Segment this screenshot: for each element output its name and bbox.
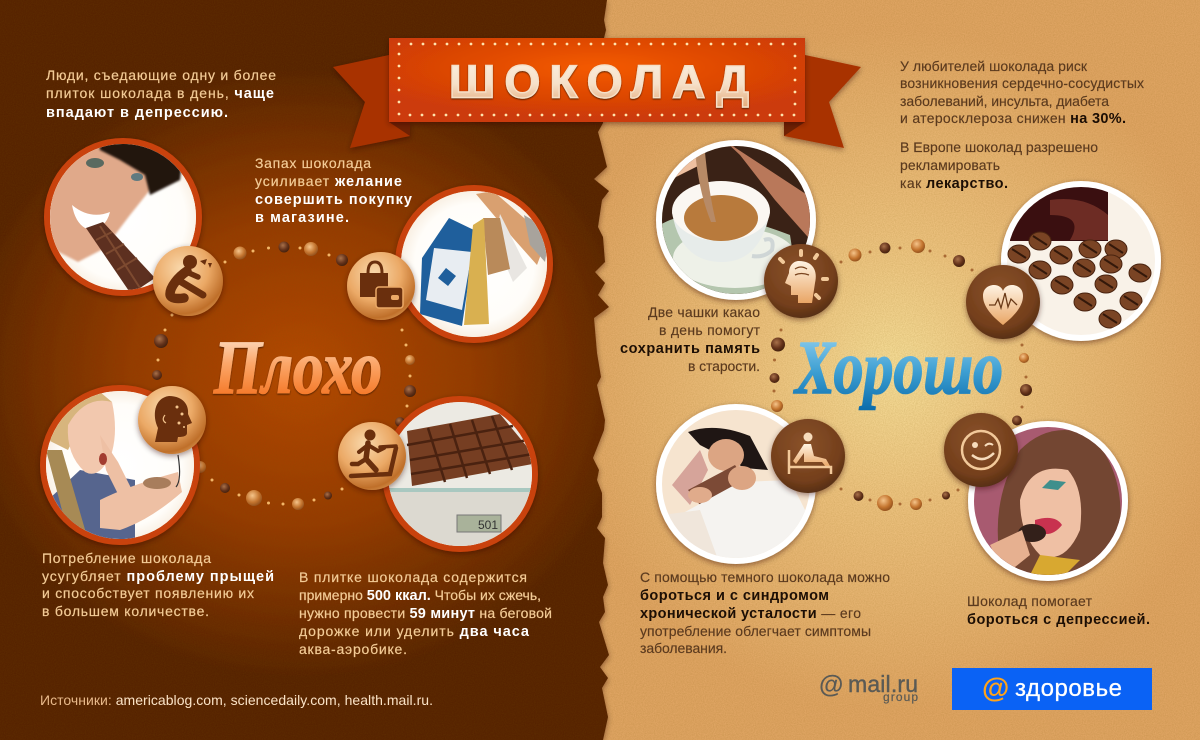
photo: woman in bed (658, 404, 818, 565)
dots ring: bad (152, 242, 416, 510)
text: memory: в старости. (688, 358, 760, 374)
text: fatigue: употребление облегчает симптомы (640, 623, 871, 639)
icon: heart pulse (966, 265, 1040, 339)
text: fatigue: хронической усталости — его (640, 605, 861, 622)
text: heart risk: У любителей шоколада риск (900, 58, 1088, 74)
text: acne: и способствует появлению их (42, 585, 254, 601)
icon: head with acne (138, 386, 206, 454)
title text: ШОКОЛАД (449, 56, 749, 108)
text: acne (42, 550, 274, 619)
logo: zdorovye: здоровье (1015, 675, 1122, 702)
logo: mail.ru group: mail.ru (848, 671, 918, 697)
text: depression: плиток шоколада в день, чаще (46, 85, 274, 102)
photo: chocolate pills (1003, 182, 1163, 342)
text: shopping: усиливает желание (255, 173, 402, 190)
heading: good: Хорошо (793, 326, 1003, 410)
logo: zdorovye: @ (982, 672, 1009, 703)
heading: bad: Плохо (213, 326, 382, 410)
text: shopping (255, 155, 412, 226)
title ribbon (333, 38, 861, 148)
text: depression: Люди, съедающие одну и более (46, 67, 276, 83)
text: shopping: в магазине. (255, 210, 349, 226)
text: calories: аква-аэробике. (299, 641, 407, 657)
dots ring: good (770, 239, 1032, 511)
photo: man eating chocolate (40, 135, 204, 298)
text: acne: в большем количестве. (42, 603, 209, 619)
text: calories (299, 569, 552, 657)
text: medicine: как лекарство. (900, 175, 1008, 192)
text: heart risk: и атеросклероза снижен на 30%. (900, 110, 1126, 127)
icon: person resting (771, 419, 845, 493)
text: fatigue (640, 569, 890, 656)
text: shopping: совершить покупку (255, 192, 412, 208)
text: fatigue: заболевания. (640, 640, 727, 656)
icon: bag and wallet (347, 252, 415, 320)
photo: chocolate on scale (385, 398, 540, 555)
logo: mail.ru group: @ (819, 671, 843, 699)
logo: mail.ru group: group (883, 690, 918, 704)
photo: cocoa cup (658, 141, 818, 301)
text: fatigue: С помощью темного шоколада можно (640, 569, 890, 585)
text: acne: Потребление шоколада (42, 550, 211, 566)
text: medicine: рекламировать (900, 157, 1000, 173)
text: acne: усугубляет проблему прыщей (42, 568, 274, 585)
text: depression relief: Шоколад помогает (967, 593, 1093, 609)
text: memory: Две чашки какао (648, 304, 760, 320)
text: memory (620, 304, 761, 374)
photo: shopping bags (397, 186, 552, 341)
text: sources: Источники: americablog.com, sciencedaily.com, health.mail.ru. (40, 692, 433, 708)
text: medicine (900, 139, 1098, 192)
logo: mail.ru group (819, 671, 918, 704)
text: depression relief (967, 593, 1150, 628)
logo: zdorovye (952, 668, 1152, 710)
icon: sad person (153, 246, 223, 316)
icon: treadmill runner (338, 422, 406, 490)
text: fatigue: бороться и с синдромом (640, 588, 829, 604)
text: calories: примерно 500 ккал. Чтобы их сжечь, (299, 587, 541, 604)
text: memory: сохранить память (620, 341, 760, 357)
text: depression (46, 67, 276, 121)
photo: happy woman (970, 420, 1130, 585)
text: heart risk: возникновения сердечно-сосудистых (900, 75, 1144, 91)
ribbon tail right (784, 55, 861, 148)
icon: brain idea (764, 244, 838, 318)
text: medicine: В Европе шоколад разрешено (900, 139, 1098, 155)
scale display: 501 (478, 518, 498, 532)
text: calories: дорожке или уделить два часа (299, 623, 530, 640)
text: shopping: Запах шоколада (255, 155, 371, 171)
ribbon tail left (333, 55, 410, 148)
text: heart risk (900, 58, 1144, 127)
background: dark torn panel (0, 0, 609, 740)
text: calories: нужно провести 59 минут на беговой (299, 605, 552, 622)
text: depression relief: бороться с депрессией. (967, 612, 1150, 628)
text: memory: в день помогут (659, 322, 761, 338)
photo: girl with acne (40, 386, 200, 546)
text: depression: впадают в депрессию. (46, 105, 228, 121)
text: heart risk: заболеваний, инсульта, диабета (900, 93, 1109, 109)
icon: winking smile (944, 413, 1018, 487)
text: calories: В плитке шоколада содержится (299, 569, 527, 585)
